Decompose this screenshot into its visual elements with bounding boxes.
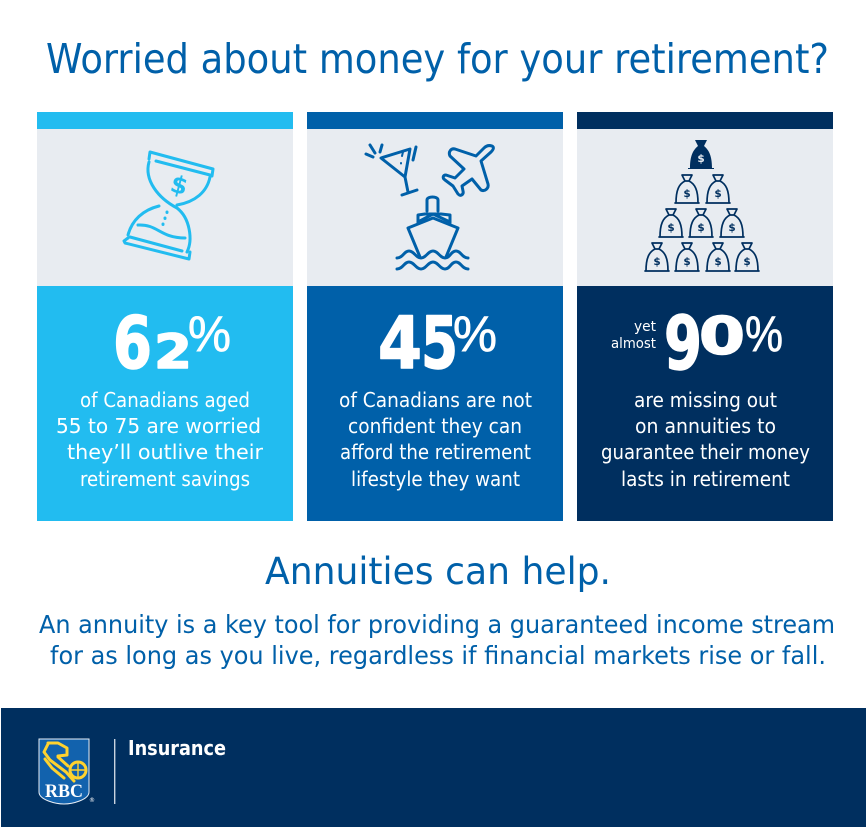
- icon: money bag pyramid: $: [667, 222, 675, 234]
- icon: lion and globe: [44, 743, 86, 781]
- icon: cruise ship: [397, 197, 468, 269]
- icon: money bag pyramid: $: [653, 256, 661, 268]
- icon: money bag pyramid: $: [697, 222, 705, 234]
- icon: money bag pyramid: [645, 175, 759, 271]
- stat: 62%: %: [188, 306, 231, 362]
- panel: missing out on annuities: [577, 112, 833, 521]
- icon: hourglass: [124, 152, 213, 259]
- heading: annuities can help: Annuities can help.: [265, 550, 611, 593]
- icon: airplane: [443, 146, 493, 195]
- text: Insurance: Insurance: [128, 736, 226, 760]
- divider: [114, 739, 115, 804]
- text: 62% description: [56, 388, 264, 491]
- text: 62% description: of Canadians aged: [80, 388, 250, 412]
- text: 45% description: afford the retirement: [340, 440, 531, 464]
- panel: outlive savings: [37, 112, 293, 521]
- text: yet almost: almost: [611, 336, 656, 352]
- icon: money bag pyramid: $: [714, 188, 722, 200]
- icon: money bag pyramid: $: [714, 256, 722, 268]
- text: yet almost: [611, 319, 656, 352]
- text: annuity explanation: for as long as you live, regardless if financial markets rise or fall.: [50, 641, 826, 670]
- stat: 90%: 0: [699, 307, 745, 367]
- text: 90% description: on annuities to: [635, 414, 776, 438]
- text: 45% description: lifestyle they want: [351, 467, 520, 491]
- logo: RBC shield: [39, 739, 95, 804]
- text: annuity explanation: An annuity is a key tool for providing a guaranteed income stream: [39, 610, 835, 639]
- stat: 45%: %: [453, 306, 497, 362]
- icon: money bag pyramid: $: [728, 222, 736, 234]
- text: 62% description: 55 to 75 are worried: [56, 414, 261, 438]
- text: 45% description: of Canadians are not: [339, 388, 532, 412]
- text: 90% description: [601, 388, 810, 491]
- stat: 45%: 4: [378, 301, 422, 385]
- stat: 62%: [113, 301, 231, 385]
- icon: solid money bag: [688, 140, 714, 169]
- icon: martini glass: [366, 145, 417, 195]
- text: 45% description: confident they can: [348, 414, 522, 438]
- text: 90% description: lasts in retirement: [621, 467, 790, 491]
- icon: money bag pyramid: $: [683, 256, 691, 268]
- stat: 90%: [664, 301, 783, 387]
- stat: 62%: 6: [113, 301, 152, 385]
- logo: RBC shield: RBC: [45, 781, 83, 802]
- logo: RBC shield: ®: [89, 797, 95, 804]
- stat: 90%: 9: [664, 301, 702, 387]
- stat: 45%: [378, 301, 497, 385]
- text: 62% description: they’ll outlive their: [67, 440, 264, 464]
- footer: [1, 708, 866, 827]
- text: annuity explanation: [39, 610, 835, 670]
- panel: retirement lifestyle: [307, 112, 563, 521]
- text: 62% description: retirement savings: [80, 467, 250, 491]
- stat: 62%: 2: [154, 325, 192, 380]
- text: 90% description: are missing out: [634, 388, 777, 412]
- icon: solid money bag: $: [697, 153, 705, 165]
- icon: money bag pyramid: $: [743, 256, 751, 268]
- text: 45% description: [339, 388, 532, 491]
- icon: money bag pyramid: $: [683, 188, 691, 200]
- icon: hourglass: $: [167, 170, 191, 201]
- text: yet almost: yet: [634, 319, 656, 335]
- text: 90% description: guarantee their money: [601, 440, 810, 464]
- stat: 45%: 5: [421, 301, 458, 385]
- stat: 90%: %: [745, 306, 783, 362]
